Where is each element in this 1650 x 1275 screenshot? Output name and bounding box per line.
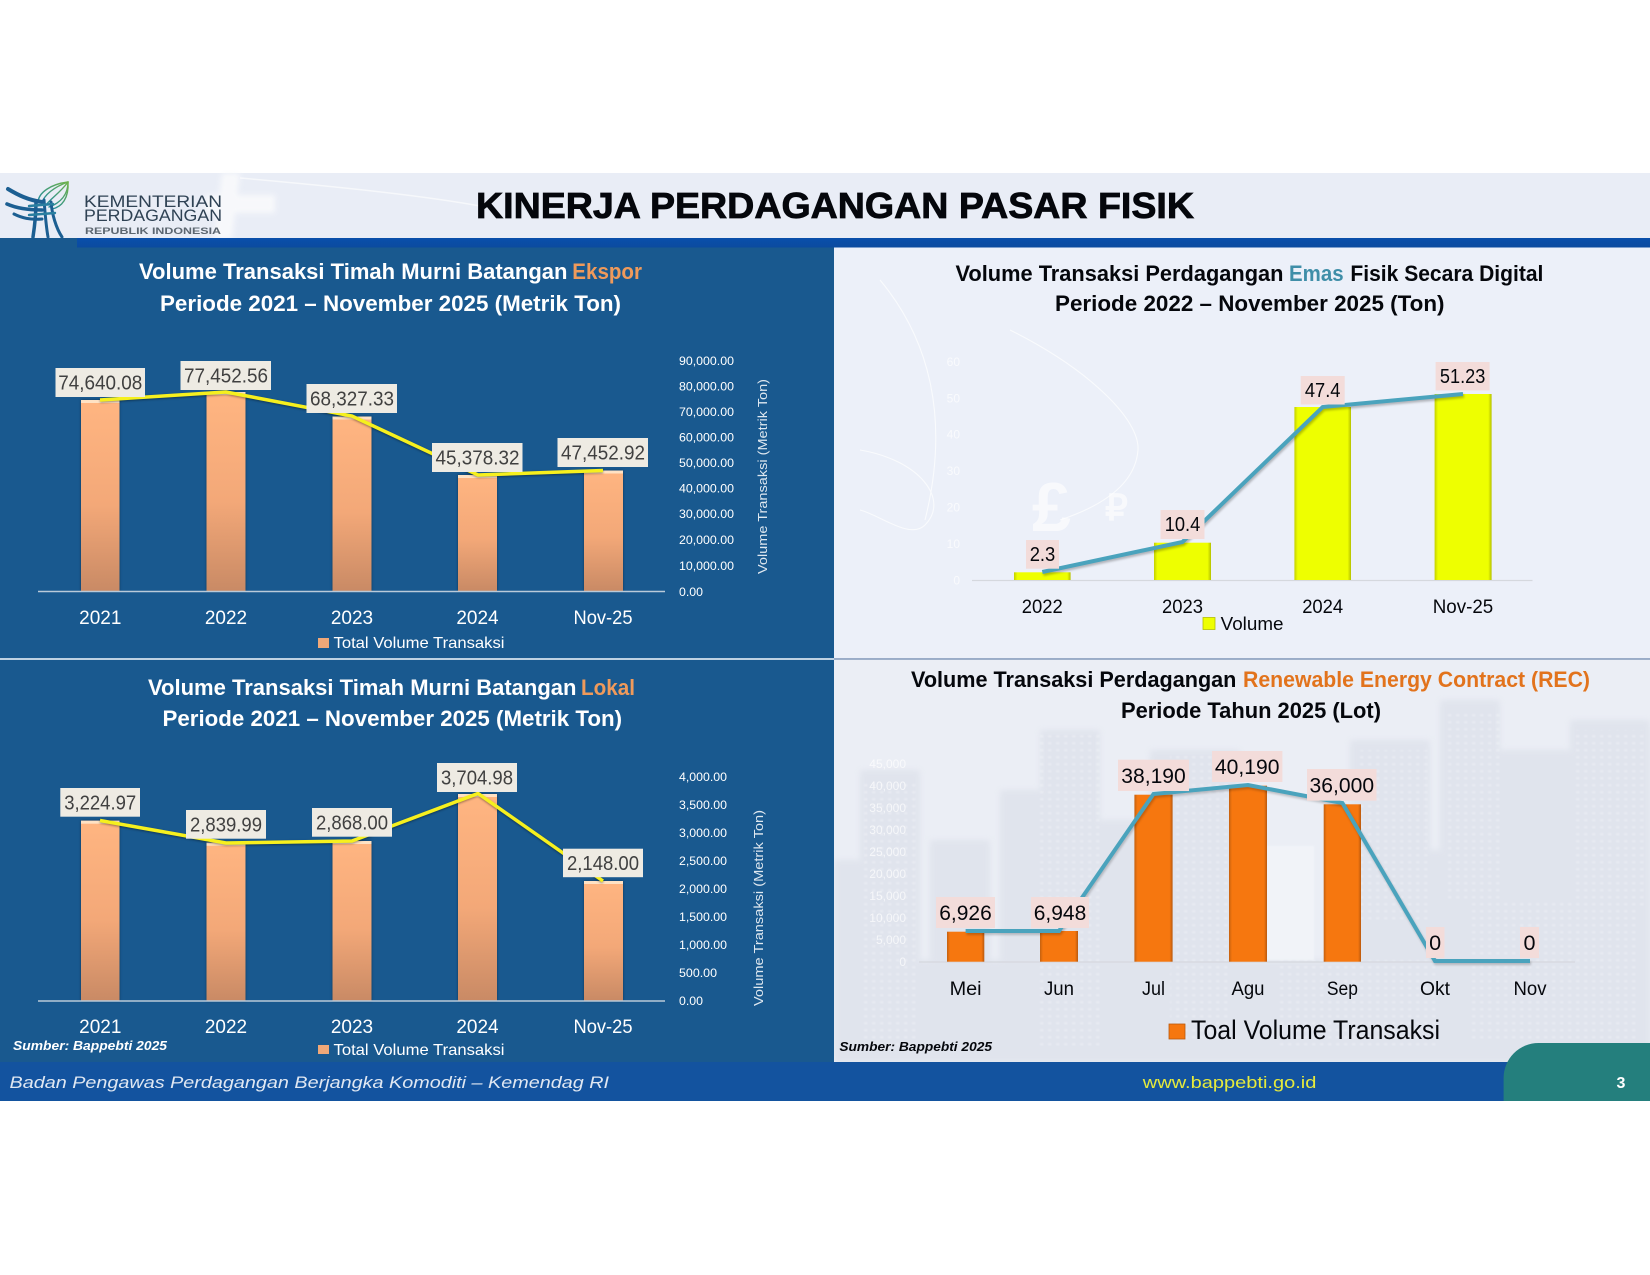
faint y axis: 30,000 — [869, 823, 906, 837]
trend line — [100, 392, 603, 475]
page number: 3 — [1617, 1075, 1626, 1092]
x axis labels: 2023 — [1162, 597, 1203, 618]
legend: Total Volume Transaksi — [334, 1042, 504, 1059]
x axis labels: 2024 — [456, 1017, 499, 1038]
y axis labels: 60,000.00 — [679, 430, 734, 444]
data labels: 6,948 — [1034, 902, 1086, 925]
x axis labels: 2024 — [456, 608, 499, 629]
y axis title: Volume Transaksi (Metrik Ton) — [755, 379, 770, 574]
data labels — [1026, 362, 1490, 569]
panel: top left background — [0, 238, 834, 658]
faint y axis: 25,000 — [869, 845, 906, 859]
x axis labels: 2022 — [1022, 597, 1063, 618]
panel: local tin chart — [13, 675, 766, 1059]
data labels — [56, 361, 648, 472]
panel: REC chart — [839, 667, 1590, 1054]
bars — [81, 794, 623, 1001]
x axis labels: Agu — [1232, 979, 1264, 1000]
heading: gold: Fisik Secara Digital — [1350, 261, 1543, 286]
axis baseline — [38, 1000, 665, 1002]
y axis labels: 70,000.00 — [679, 405, 734, 419]
logo text: REPUBLIK INDONESIA — [85, 226, 221, 237]
heading: gold: Volume Transaksi Perdagangan — [956, 261, 1284, 286]
panel: top right background — [834, 239, 1650, 659]
x axis labels: Jul — [1142, 979, 1165, 1000]
data labels: 51.23 — [1440, 366, 1485, 388]
data labels: 10.4 — [1165, 514, 1200, 536]
heading: REC — [911, 667, 1590, 692]
y axis title: Volume Transaksi (Metrik Ton) — [751, 810, 766, 1006]
trend line — [1042, 394, 1463, 572]
x axis labels — [1022, 597, 1493, 618]
title: KINERJA PERDAGANGAN PASAR FISIK — [476, 185, 1195, 226]
logo text: KEMENTERIAN — [84, 193, 222, 211]
heading period: Periode 2022 – November 2025 (Ton) — [1055, 291, 1444, 316]
panel: footer — [0, 1043, 1650, 1101]
data labels: 3,704.98 — [441, 768, 513, 790]
logo text — [84, 193, 222, 237]
x axis labels: Nov-25 — [1433, 597, 1493, 618]
faint y axis: 5,000 — [876, 933, 906, 947]
bars — [81, 392, 623, 591]
heading: export tin: Volume Transaksi Timah Murni Batangan — [139, 259, 568, 284]
bars — [947, 786, 1361, 962]
x axis labels: Nov-25 — [574, 1017, 632, 1038]
faint y axis: 40,000 — [869, 779, 906, 793]
axis baseline — [919, 961, 1575, 963]
heading: gold: Emas — [1289, 261, 1344, 286]
x axis labels: Nov — [1514, 979, 1547, 1000]
heading: local tin: Lokal — [581, 675, 635, 700]
y axis labels: 2,500.00 — [679, 854, 727, 868]
y axis labels: 0.00 — [679, 585, 703, 599]
data labels: 47,452.92 — [561, 442, 645, 464]
panel: export tin chart — [38, 259, 770, 652]
y axis labels: 40,000.00 — [679, 482, 734, 496]
heading period: Periode Tahun 2025 (Lot) — [1121, 698, 1381, 723]
data labels: 2,839.99 — [190, 814, 262, 836]
legend: Total Volume Transaksi — [334, 635, 504, 652]
y axis labels: 2,000.00 — [679, 882, 727, 896]
panel: bottom right background — [834, 660, 1650, 1063]
panel dividers — [0, 658, 1650, 660]
data labels: 45,378.32 — [436, 448, 520, 470]
faint y axis: 0 — [953, 574, 960, 588]
heading: REC: Renewable Energy Contract (REC) — [1243, 667, 1590, 692]
x axis labels: Nov-25 — [574, 608, 632, 629]
data labels: 2,148.00 — [567, 853, 639, 875]
faint y axis: 40 — [947, 428, 960, 442]
axis baseline — [972, 580, 1532, 582]
data labels: 2,868.00 — [316, 812, 388, 834]
heading: REC: Volume Transaksi Perdagangan — [911, 667, 1236, 692]
trend line — [966, 785, 1530, 961]
y axis labels: 500.00 — [679, 966, 717, 980]
faint y axis: 30 — [947, 464, 960, 478]
x axis labels: Okt — [1420, 979, 1451, 1000]
data labels: 0 — [1524, 932, 1536, 955]
data labels: 68,327.33 — [310, 388, 394, 410]
source note: Sumber: Bappebti 2025 — [839, 1039, 993, 1054]
y axis labels — [679, 354, 734, 599]
faint y axis: 10 — [947, 537, 960, 551]
x axis labels: 2023 — [331, 608, 373, 629]
panel: slide header — [0, 173, 1650, 239]
faint y axis: 15,000 — [869, 889, 906, 903]
y axis labels: 3,000.00 — [679, 826, 727, 840]
logo text: PERDAGANGAN — [84, 207, 222, 225]
panel: bottom left background — [0, 660, 834, 1062]
y axis labels — [679, 770, 727, 1008]
footer website: www.bappebti.go.id — [1142, 1073, 1316, 1092]
x axis labels: Jun — [1044, 979, 1074, 1000]
y axis labels: 0.00 — [679, 994, 703, 1008]
x axis labels: 2022 — [205, 608, 247, 629]
data labels: 77,452.56 — [184, 366, 268, 388]
faint y axis: 35,000 — [869, 801, 906, 815]
header accent stripe — [77, 238, 1650, 248]
data labels: 47.4 — [1305, 380, 1340, 402]
faint y axis: 20 — [947, 500, 960, 514]
x axis labels — [950, 979, 1547, 1000]
y axis labels: 50,000.00 — [679, 456, 734, 470]
x axis labels — [79, 608, 633, 629]
legend: Toal Volume Transaksi — [1191, 1015, 1440, 1045]
faint y axis: 0 — [899, 955, 906, 969]
data labels: 36,000 — [1310, 774, 1374, 798]
heading: local tin: Volume Transaksi Timah Murni Batangan — [148, 675, 576, 700]
y axis labels: 10,000.00 — [679, 559, 734, 573]
y axis labels: 1,000.00 — [679, 938, 727, 952]
heading period: Periode 2021 – November 2025 (Metrik Ton) — [162, 706, 622, 731]
y axis labels: 4,000.00 — [679, 770, 727, 784]
data labels: 2.3 — [1030, 544, 1055, 566]
faint y axis — [947, 355, 960, 588]
y axis labels: 90,000.00 — [679, 354, 734, 368]
icon: ministry logo — [7, 182, 68, 237]
data labels: 0 — [1429, 932, 1441, 955]
source note: Sumber: Bappebti 2025 — [13, 1038, 168, 1053]
faint y axis — [869, 757, 906, 969]
data labels — [60, 763, 643, 877]
axis baseline — [38, 590, 665, 592]
heading: export tin: Ekspor — [572, 259, 642, 284]
faint y axis: 60 — [947, 355, 960, 369]
y axis labels: 30,000.00 — [679, 507, 734, 521]
y axis labels: 20,000.00 — [679, 533, 734, 547]
trend line — [100, 794, 603, 881]
y axis labels: 1,500.00 — [679, 910, 727, 924]
x axis labels: Sep — [1327, 979, 1358, 1000]
x axis labels — [79, 1017, 633, 1038]
faint y axis: 50 — [947, 392, 960, 406]
x axis labels: 2022 — [205, 1017, 247, 1038]
y axis labels: 3,500.00 — [679, 798, 727, 812]
heading: gold — [956, 261, 1543, 286]
y axis labels: 80,000.00 — [679, 380, 734, 394]
x axis labels: 2024 — [1302, 597, 1344, 618]
data labels — [936, 751, 1539, 958]
icon: pound sign: £ — [1032, 468, 1071, 546]
icon: ruble sign: ₽ — [1105, 487, 1128, 528]
data labels: 38,190 — [1121, 765, 1186, 788]
x axis labels: 2023 — [331, 1017, 373, 1038]
footer tab — [1504, 1043, 1650, 1101]
faint y axis: 20,000 — [869, 867, 906, 881]
data labels: 74,640.08 — [58, 372, 142, 394]
data labels: 3,224.97 — [64, 792, 136, 814]
x axis labels: 2021 — [79, 1017, 121, 1038]
x axis labels: Mei — [950, 979, 982, 1000]
footer organisation: Badan Pengawas Perdagangan Berjangka Komoditi – Kemendag RI — [10, 1073, 609, 1092]
faint y axis: 10,000 — [869, 911, 906, 925]
panel: gold chart — [947, 261, 1543, 634]
heading period: Periode 2021 – November 2025 (Metrik Ton) — [160, 291, 621, 316]
bars — [1014, 394, 1492, 580]
data labels: 6,926 — [939, 902, 992, 925]
data labels: 40,190 — [1215, 756, 1279, 779]
x axis labels: 2021 — [79, 608, 121, 629]
faint y axis: 45,000 — [869, 757, 906, 771]
legend: Volume — [1221, 613, 1284, 634]
